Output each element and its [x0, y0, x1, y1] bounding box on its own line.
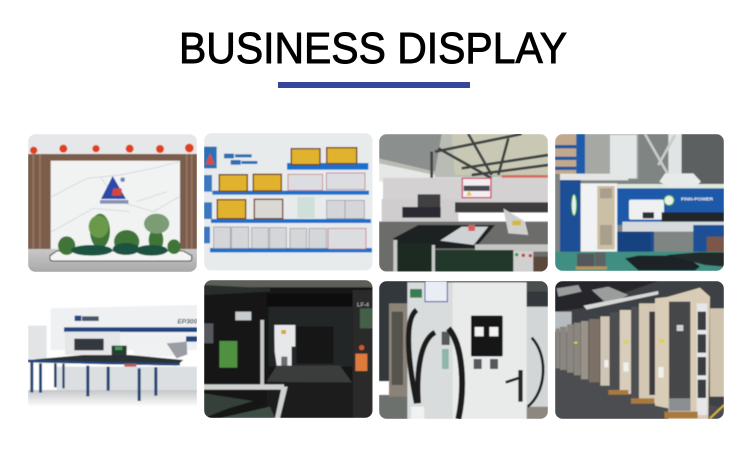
title: BUSINESS DISPLAY [179, 24, 567, 73]
photo: certificates on blue shelves [204, 133, 373, 271]
photo: white CNC punch press [28, 305, 197, 404]
photo: rows of electrical cabinets [555, 281, 724, 419]
photo: blue turret press machine [555, 134, 724, 271]
photo: dark laser cutting machine [204, 280, 373, 418]
title underline bar [278, 82, 470, 88]
machine brand label: FINN-POWER [681, 196, 714, 202]
photo: punching machine in workshop [379, 134, 548, 272]
machine model label: EP300 [177, 319, 198, 326]
photo: showroom wall with logo [28, 134, 197, 272]
photo: EV charging pile [379, 281, 548, 419]
machine label: LF-4 [357, 303, 370, 309]
